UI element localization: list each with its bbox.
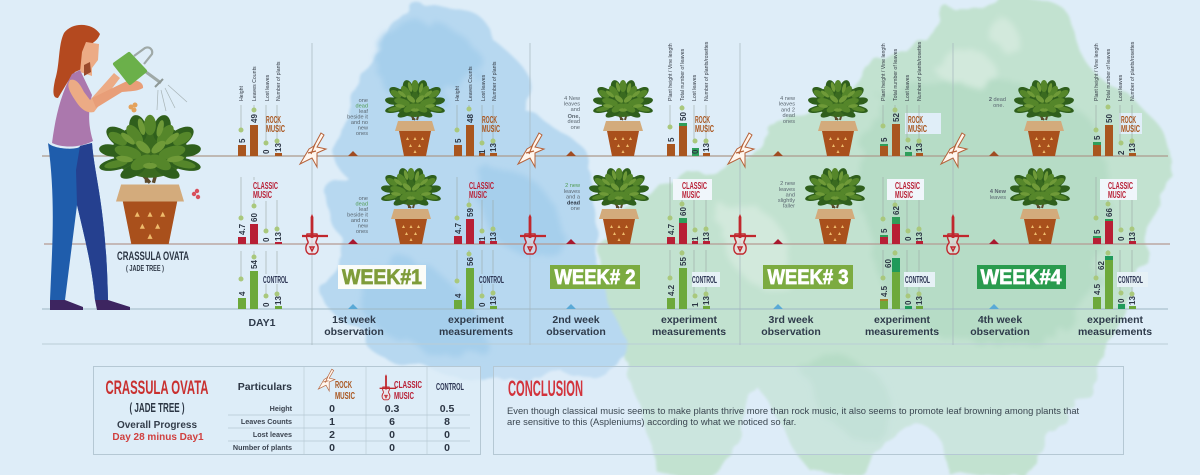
chart: week 2 rock: Total number of leaves	[680, 48, 686, 101]
table heading: Day 28 minus Day1	[112, 432, 204, 443]
observation notes: week 2 rock: leaves	[564, 102, 580, 108]
chart: day 1 rock: 0	[262, 149, 271, 154]
chart: day 1 control	[238, 251, 288, 309]
chart: week 1 classic: MUSIC	[469, 189, 487, 201]
observation notes: week 2 rock: 4 New	[564, 96, 581, 102]
chart: week 4 control: 4.5	[1093, 283, 1102, 295]
chart: week 4 rock: 5	[1093, 135, 1102, 140]
plant: week 1 rock	[384, 79, 446, 156]
label: 1st week observation: observation	[324, 326, 384, 338]
observation notes: week 1 classic: and no	[351, 218, 368, 224]
label: week 2 measurements: measurements	[652, 326, 726, 338]
table column headers: CLASSIC	[394, 380, 422, 391]
observation notes: week 3 rock: ones	[783, 119, 795, 125]
panel: conclusion	[494, 366, 1124, 454]
chart: day 1 rock: ROCK	[266, 114, 281, 126]
chart: week 2 rock	[667, 41, 714, 156]
chart: week 2 rock: Plant height / Vine length	[668, 43, 674, 101]
chart: week 4 classic: MUSIC	[1108, 189, 1126, 201]
chart: week 3 rock: Plant height / Vine length	[881, 43, 887, 101]
chart: week 1 classic: 1	[478, 236, 487, 241]
plant: week 1 classic	[380, 167, 442, 244]
chart: week 3 rock: 52	[892, 113, 901, 122]
observation notes: week 1 rock: one	[359, 98, 368, 104]
chart: week 2 classic: 60	[679, 207, 688, 216]
observation notes: week 4 rock: 2 dead	[989, 97, 1006, 103]
label: 4th week observation: 4th week	[978, 314, 1022, 326]
chart: day 1 rock: Height	[239, 85, 245, 101]
chart: week 4 classic: 0	[1117, 236, 1126, 241]
chart: day 1 control: 0	[262, 302, 271, 307]
chart: week 4 classic: 13	[1128, 232, 1137, 241]
chart: week 4 control: 62	[1097, 261, 1106, 270]
label: 3rd week observation: observation	[761, 326, 821, 338]
label: 1st week observation: 1st week	[332, 314, 376, 326]
plant name: ( JADE TREE )	[126, 264, 164, 273]
chart: week 1 classic	[454, 177, 498, 244]
table column headers: MUSIC	[335, 391, 355, 402]
chart: week 2 classic: 1	[691, 236, 700, 241]
chart: week 3 classic: 5	[880, 228, 889, 233]
chart: week 1 classic: 13	[489, 232, 498, 241]
chart: week 2 control	[667, 250, 720, 309]
chart: week 1 control: 56	[466, 257, 475, 266]
plant: week 4 rock	[1013, 79, 1075, 156]
chart: day 1 classic: MUSIC	[253, 189, 272, 201]
table rows	[233, 403, 454, 454]
observation notes: week 4 classic: leaves	[990, 195, 1006, 201]
watercolour: green wash	[600, 0, 1172, 475]
chart: week 1 rock: Lost leaves	[481, 74, 487, 101]
chart: week 2 classic: CLASSIC	[682, 180, 707, 192]
icons: violins	[302, 214, 969, 254]
badge: week 2: WEEK# 2	[554, 266, 636, 289]
chart: week 4 rock: 13	[1128, 143, 1137, 152]
observation notes: week 1 classic: one	[359, 196, 368, 202]
plant: week 2 rock	[592, 79, 654, 156]
conclusion heading: CONCLUSION	[508, 376, 583, 401]
chart: week 1 control	[454, 250, 504, 309]
chart: week 2 classic: MUSIC	[682, 189, 700, 201]
chart: week 4 classic: 5	[1093, 229, 1102, 234]
label: 4th week observation: observation	[970, 326, 1030, 338]
chart: week 1 control: 4	[454, 293, 463, 298]
observation notes: week 1 rock: and no	[351, 120, 368, 126]
chart: day 1 rock: Leaves Counts	[252, 66, 258, 101]
markers: observation triangles	[348, 151, 999, 309]
chart: day 1 classic: 0	[262, 237, 271, 242]
chart: week 4 rock: Plant height / Vine length	[1094, 43, 1100, 101]
label: 2nd week observation: observation	[546, 326, 606, 338]
label: 3rd week observation: 3rd week	[769, 314, 814, 326]
observation notes: week 4 rock: one.	[993, 103, 1004, 109]
observation notes: week 2 rock: dead	[568, 119, 580, 125]
chart: week 1 control: 0	[478, 302, 487, 307]
plant: day 1 large jade tree	[98, 113, 202, 244]
chart: week 4 control: CONTROL	[1118, 274, 1143, 286]
table rows: 0	[329, 442, 335, 454]
chart: week 4 rock: ROCK	[1121, 114, 1136, 126]
table rows: Lost leaves	[253, 430, 292, 439]
chart: week 3 control: 4.5	[880, 285, 889, 297]
chart: day 1 classic: 13	[274, 232, 283, 241]
chart: week 2 classic: 4.7	[667, 223, 676, 235]
label: week 3 measurements: experiment	[874, 314, 931, 326]
illustration: woman watering plant	[48, 25, 187, 310]
watercolour: blue wash	[324, 5, 645, 381]
chart: week 1 rock: MUSIC	[482, 123, 500, 135]
chart: week 1 rock: ROCK	[482, 114, 497, 126]
icon: music notes	[128, 102, 138, 112]
table rows: 0	[329, 403, 335, 415]
panel: overall progress table	[94, 366, 480, 454]
table rows: 2	[329, 429, 335, 441]
chart: week 3 classic: CLASSIC	[895, 180, 920, 192]
chart: week 2 classic: 13	[702, 232, 711, 241]
text: CONTROL	[479, 274, 504, 286]
observation notes: week 2 classic: and a	[566, 194, 581, 200]
chart: week 3 classic: MUSIC	[895, 189, 913, 201]
chart: week 2 rock: 50	[679, 112, 688, 121]
label: week 4 measurements: measurements	[1078, 326, 1152, 338]
chart: week 4 rock: Total number of leaves	[1106, 48, 1112, 101]
chart: week 4 rock: Number of plants/rosettes	[1130, 41, 1136, 101]
label: week 2 measurements: experiment	[661, 314, 718, 326]
chart: week 1 rock: 5	[454, 138, 463, 143]
label: week 3 measurements: measurements	[865, 326, 939, 338]
chart: week 4 rock: 2	[1117, 150, 1126, 155]
chart: week 3 classic	[880, 177, 924, 244]
badge: week 1: WEEK#1	[342, 266, 422, 289]
observation notes: week 3 rock: leaves	[779, 102, 795, 108]
badge: week 3: WEEK# 3	[768, 266, 848, 289]
chart: week 4 rock: Lost leaves	[1118, 74, 1124, 101]
chart: week 3 control: 13	[915, 296, 924, 305]
chart: week 4 classic: CLASSIC	[1108, 180, 1133, 192]
table rows: 0	[389, 442, 395, 454]
observation notes: week 2 classic: leaves	[564, 189, 580, 195]
label: week 4 measurements: experiment	[1087, 314, 1144, 326]
observation notes: week 3 rock: dead	[783, 113, 795, 119]
chart: week 2 rock: 13	[702, 143, 711, 152]
badge: week 4: WEEK#4	[980, 266, 1062, 289]
chart: day 1 control: 4	[238, 291, 247, 296]
table rows: Leaves Counts	[241, 417, 292, 426]
label: day 1: DAY1	[248, 317, 276, 329]
table rows: 8	[444, 416, 450, 428]
chart: week 3 rock: 13	[915, 143, 924, 152]
table column headers: MUSIC	[394, 391, 414, 402]
observation notes: week 1 classic: dead	[356, 202, 368, 208]
chart: week 2 control: 1	[691, 302, 700, 307]
chart: week 1 rock: Height	[455, 85, 461, 101]
chart: day 1 rock: Lost leaves	[265, 74, 271, 101]
observation notes: week 3 classic: and	[786, 192, 795, 198]
table column headers: CONTROL	[436, 382, 464, 393]
table rows: 0	[444, 442, 450, 454]
conclusion body: are sensitive to this (Aspleniums) according to what we noticed so far.	[507, 416, 796, 427]
observation notes: week 1 rock: beside it	[347, 114, 368, 120]
observation notes: week 2 classic: one	[571, 206, 580, 212]
chart: week 2 rock: 5	[667, 137, 676, 142]
chart: week 2 rock: Lost leaves	[692, 74, 698, 101]
chart: week 2 rock: ROCK	[695, 114, 710, 126]
watercolour: lighter green patches	[720, 20, 1022, 292]
observation notes: week 3 classic: 2 new	[780, 181, 796, 187]
chart: day 1 rock: 49	[250, 114, 259, 123]
table rows: 0	[444, 429, 450, 441]
chart: week 1 classic: CLASSIC	[469, 180, 494, 192]
observation notes: week 3 rock: and 2	[781, 108, 795, 114]
chart: week 2 rock: Number of plants/rosettes	[704, 41, 710, 101]
observation notes: week 4 classic: 4 New	[990, 189, 1007, 195]
chart: week 3 control	[880, 250, 935, 309]
observation notes: week 2 rock: and	[571, 107, 580, 113]
chart: day 1 rock: MUSIC	[266, 123, 285, 135]
chart: week 2 rock: 0	[691, 149, 700, 154]
chart: week 3 rock	[880, 41, 941, 156]
chart: week 2 classic	[667, 177, 712, 244]
table heading: Overall Progress	[117, 420, 197, 431]
chart: day 1 rock: 5	[238, 138, 247, 143]
table rows: Height	[270, 404, 293, 413]
chart: week 2 control: CONTROL	[692, 274, 717, 286]
chart: week 3 classic: 62	[892, 206, 901, 215]
observation notes: week 1 classic: leaf	[359, 207, 368, 213]
table heading	[106, 378, 209, 443]
table heading: ( JADE TREE )	[130, 400, 184, 415]
plant name: CRASSULA OVATA	[117, 249, 189, 263]
table rows: 1	[329, 416, 335, 428]
plant name	[117, 249, 189, 273]
plant: week 3 classic	[804, 167, 866, 244]
observation notes: week 2 classic: dead	[567, 200, 581, 206]
chart: day 1 classic: 60	[250, 213, 259, 222]
observation notes: week 1 rock: new	[358, 126, 369, 132]
observation notes: week 3 classic: slightly	[778, 198, 795, 204]
conclusion body: Even though classical music seems to make plants thrive more than rock music, it also seems to promote leaf browning among plants that	[507, 405, 1080, 416]
chart: week 3 classic: 13	[915, 232, 924, 241]
plant: week 4 classic	[1009, 167, 1071, 244]
text: CONTROL	[263, 274, 288, 286]
table column headers: Particulars	[238, 381, 292, 393]
chart: week 3 control: CONTROL	[905, 274, 930, 286]
plant: week 3 rock	[807, 79, 869, 156]
observation notes: week 1 classic: beside it	[347, 212, 368, 218]
observation notes: week 1 classic: new	[358, 224, 369, 230]
chart: week 1 rock: 13	[489, 143, 498, 152]
observation notes: week 2 rock: one	[571, 125, 580, 131]
chart: day 1 classic: CLASSIC	[253, 180, 278, 192]
observation notes: week 3 classic: leaves	[779, 187, 795, 193]
plant: week 2 classic	[588, 167, 650, 244]
chart: week 3 rock: Total number of leaves	[893, 48, 899, 101]
table column headers: ROCK	[335, 380, 352, 391]
chart: week 1 rock	[454, 61, 500, 156]
chart: week 3 rock: Lost leaves	[905, 74, 911, 101]
table rows: 0.5	[440, 403, 454, 415]
chart: day 1 rock: Number of plants	[276, 61, 282, 101]
observation notes: week 2 classic: 2 new	[565, 183, 581, 189]
table column headers	[238, 369, 464, 402]
chart: week 1 rock: Leaves Counts	[468, 66, 474, 101]
chart: week 4 classic: 66	[1105, 208, 1114, 217]
chart: week 3 rock: 2	[904, 145, 913, 150]
observation notes: week 1 rock: dead	[356, 104, 368, 110]
chart: day 1 rock	[238, 61, 285, 156]
observation notes: week 3 classic: faller	[783, 204, 795, 210]
chart: day 1 control: 13	[274, 296, 283, 305]
axis lines	[42, 43, 1170, 345]
chart: week 3 rock: MUSIC	[908, 123, 927, 135]
chart: week 3 control: 60	[884, 259, 893, 268]
chart: week 4 rock: 50	[1105, 114, 1114, 123]
chart: week 4 classic	[1093, 177, 1137, 244]
chart: day 1 classic	[238, 177, 283, 244]
chart: week 4 rock: MUSIC	[1121, 123, 1140, 135]
table rows: Number of plants	[233, 443, 292, 452]
chart: week 2 control: 4.2	[667, 284, 676, 296]
icons: guitars	[300, 133, 967, 167]
chart: week 1 rock: 1	[478, 149, 487, 154]
label: 2nd week observation: 2nd week	[552, 314, 600, 326]
chart: week 1 rock: 48	[466, 114, 475, 123]
chart: day 1 control: 54	[250, 260, 259, 269]
observation notes: week 1 rock: leaf	[359, 109, 368, 115]
chart: week 4 control: 13	[1128, 296, 1137, 305]
chart: day 1 rock: 13	[274, 143, 283, 152]
observation notes: week 1 classic: ones	[356, 229, 368, 235]
chart: week 1 rock: Number of plants	[492, 61, 498, 101]
table rows: 0.3	[385, 403, 399, 415]
chart: week 4 control: 0	[1117, 298, 1126, 303]
watercolour: darker blue patches	[362, 23, 560, 356]
watercolour: darker green patches	[800, 80, 1108, 434]
chart: week 2 control: 55	[679, 257, 688, 266]
chart: week 1 classic: 59	[466, 208, 475, 217]
label: week 1 measurements: measurements	[439, 326, 513, 338]
chart: week 3 rock: 5	[880, 137, 889, 142]
chart: week 3 rock: Number of plants/rosettes	[917, 41, 923, 101]
icon: red music notes	[192, 189, 200, 199]
chart: week 4 rock	[1093, 41, 1142, 156]
chart: day 1 classic: 4.7	[238, 223, 247, 235]
chart: week 4 control	[1093, 250, 1148, 309]
chart: week 2 control: 13	[702, 296, 711, 305]
observation notes: week 1 rock: ones	[356, 131, 368, 137]
observation notes: week 3 rock: 4 new	[780, 96, 796, 102]
observation notes: week 2 rock: One,	[568, 114, 580, 120]
chart: week 2 rock: MUSIC	[695, 123, 714, 135]
table heading: CRASSULA OVATA	[106, 378, 209, 399]
label: week 1 measurements: experiment	[448, 314, 505, 326]
table rows: 0	[389, 429, 395, 441]
table rows: 6	[389, 416, 395, 428]
chart: week 3 classic: 0	[904, 236, 913, 241]
chart: week 3 control: 0	[904, 300, 913, 305]
chart: week 1 control: 13	[489, 296, 498, 305]
chart: week 3 rock: ROCK	[908, 114, 923, 126]
chart: week 1 classic: 4.7	[454, 222, 463, 234]
